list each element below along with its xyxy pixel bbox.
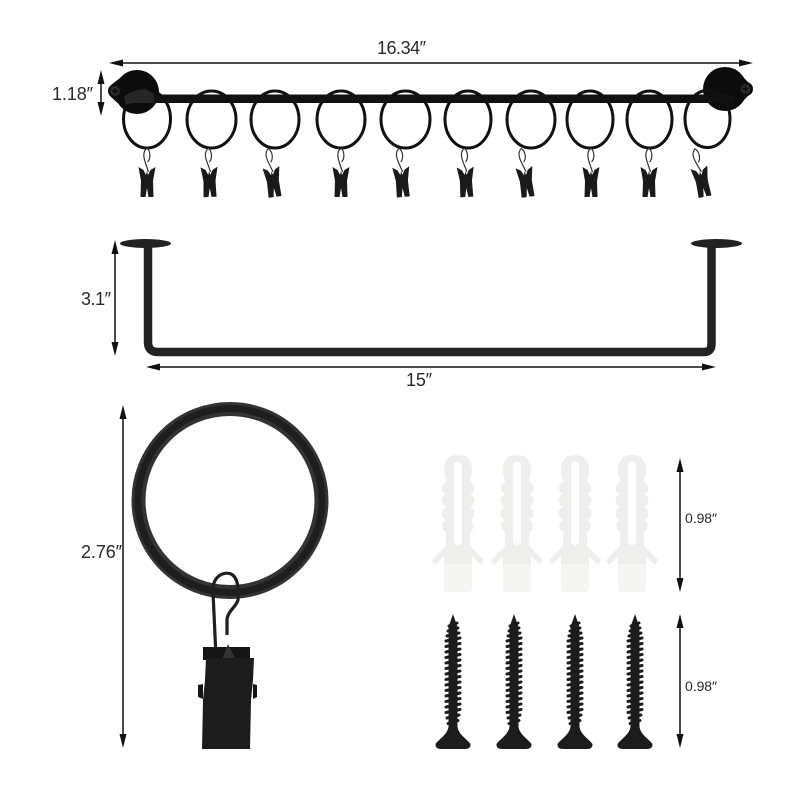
dimension: depth 3.1 (81, 240, 118, 356)
large ring (138, 408, 322, 592)
dimension: height 1.18: 1.18″ (52, 84, 94, 104)
dimension: ring height 2.76 (81, 405, 126, 748)
product: rail with rings and clips (108, 67, 753, 198)
dimension: overall width 16.34 (109, 38, 753, 66)
dimension: screw length 0.98 (676, 614, 717, 748)
bent rod (148, 245, 712, 352)
wall anchors (432, 455, 658, 592)
left wall plate (108, 70, 159, 114)
first ring (124, 90, 170, 148)
product: large ring with clip (138, 408, 322, 749)
dimension: screw length 0.98: 0.98″ (685, 678, 717, 694)
dimension: length 15 (146, 364, 716, 390)
small clips (138, 147, 713, 198)
product: side view of rail (120, 239, 742, 352)
hook wire (213, 573, 238, 657)
dimension: anchor length 0.98 (676, 458, 717, 592)
dimension: depth 3.1: 3.1″ (81, 289, 112, 309)
dimension: height 1.18 (52, 70, 104, 116)
right wall plate (703, 67, 753, 111)
dimension: ring height 2.76: 2.76″ (81, 542, 123, 562)
dimension: length 15: 15″ (406, 370, 433, 390)
mounting plates (120, 239, 742, 248)
screws (435, 614, 653, 749)
dimension: overall width 16.34: 16.34″ (377, 38, 427, 58)
dimension: anchor length 0.98: 0.98″ (685, 510, 717, 526)
clip body (198, 644, 257, 749)
curtain rings (187, 90, 730, 148)
horizontal rail (124, 89, 735, 105)
